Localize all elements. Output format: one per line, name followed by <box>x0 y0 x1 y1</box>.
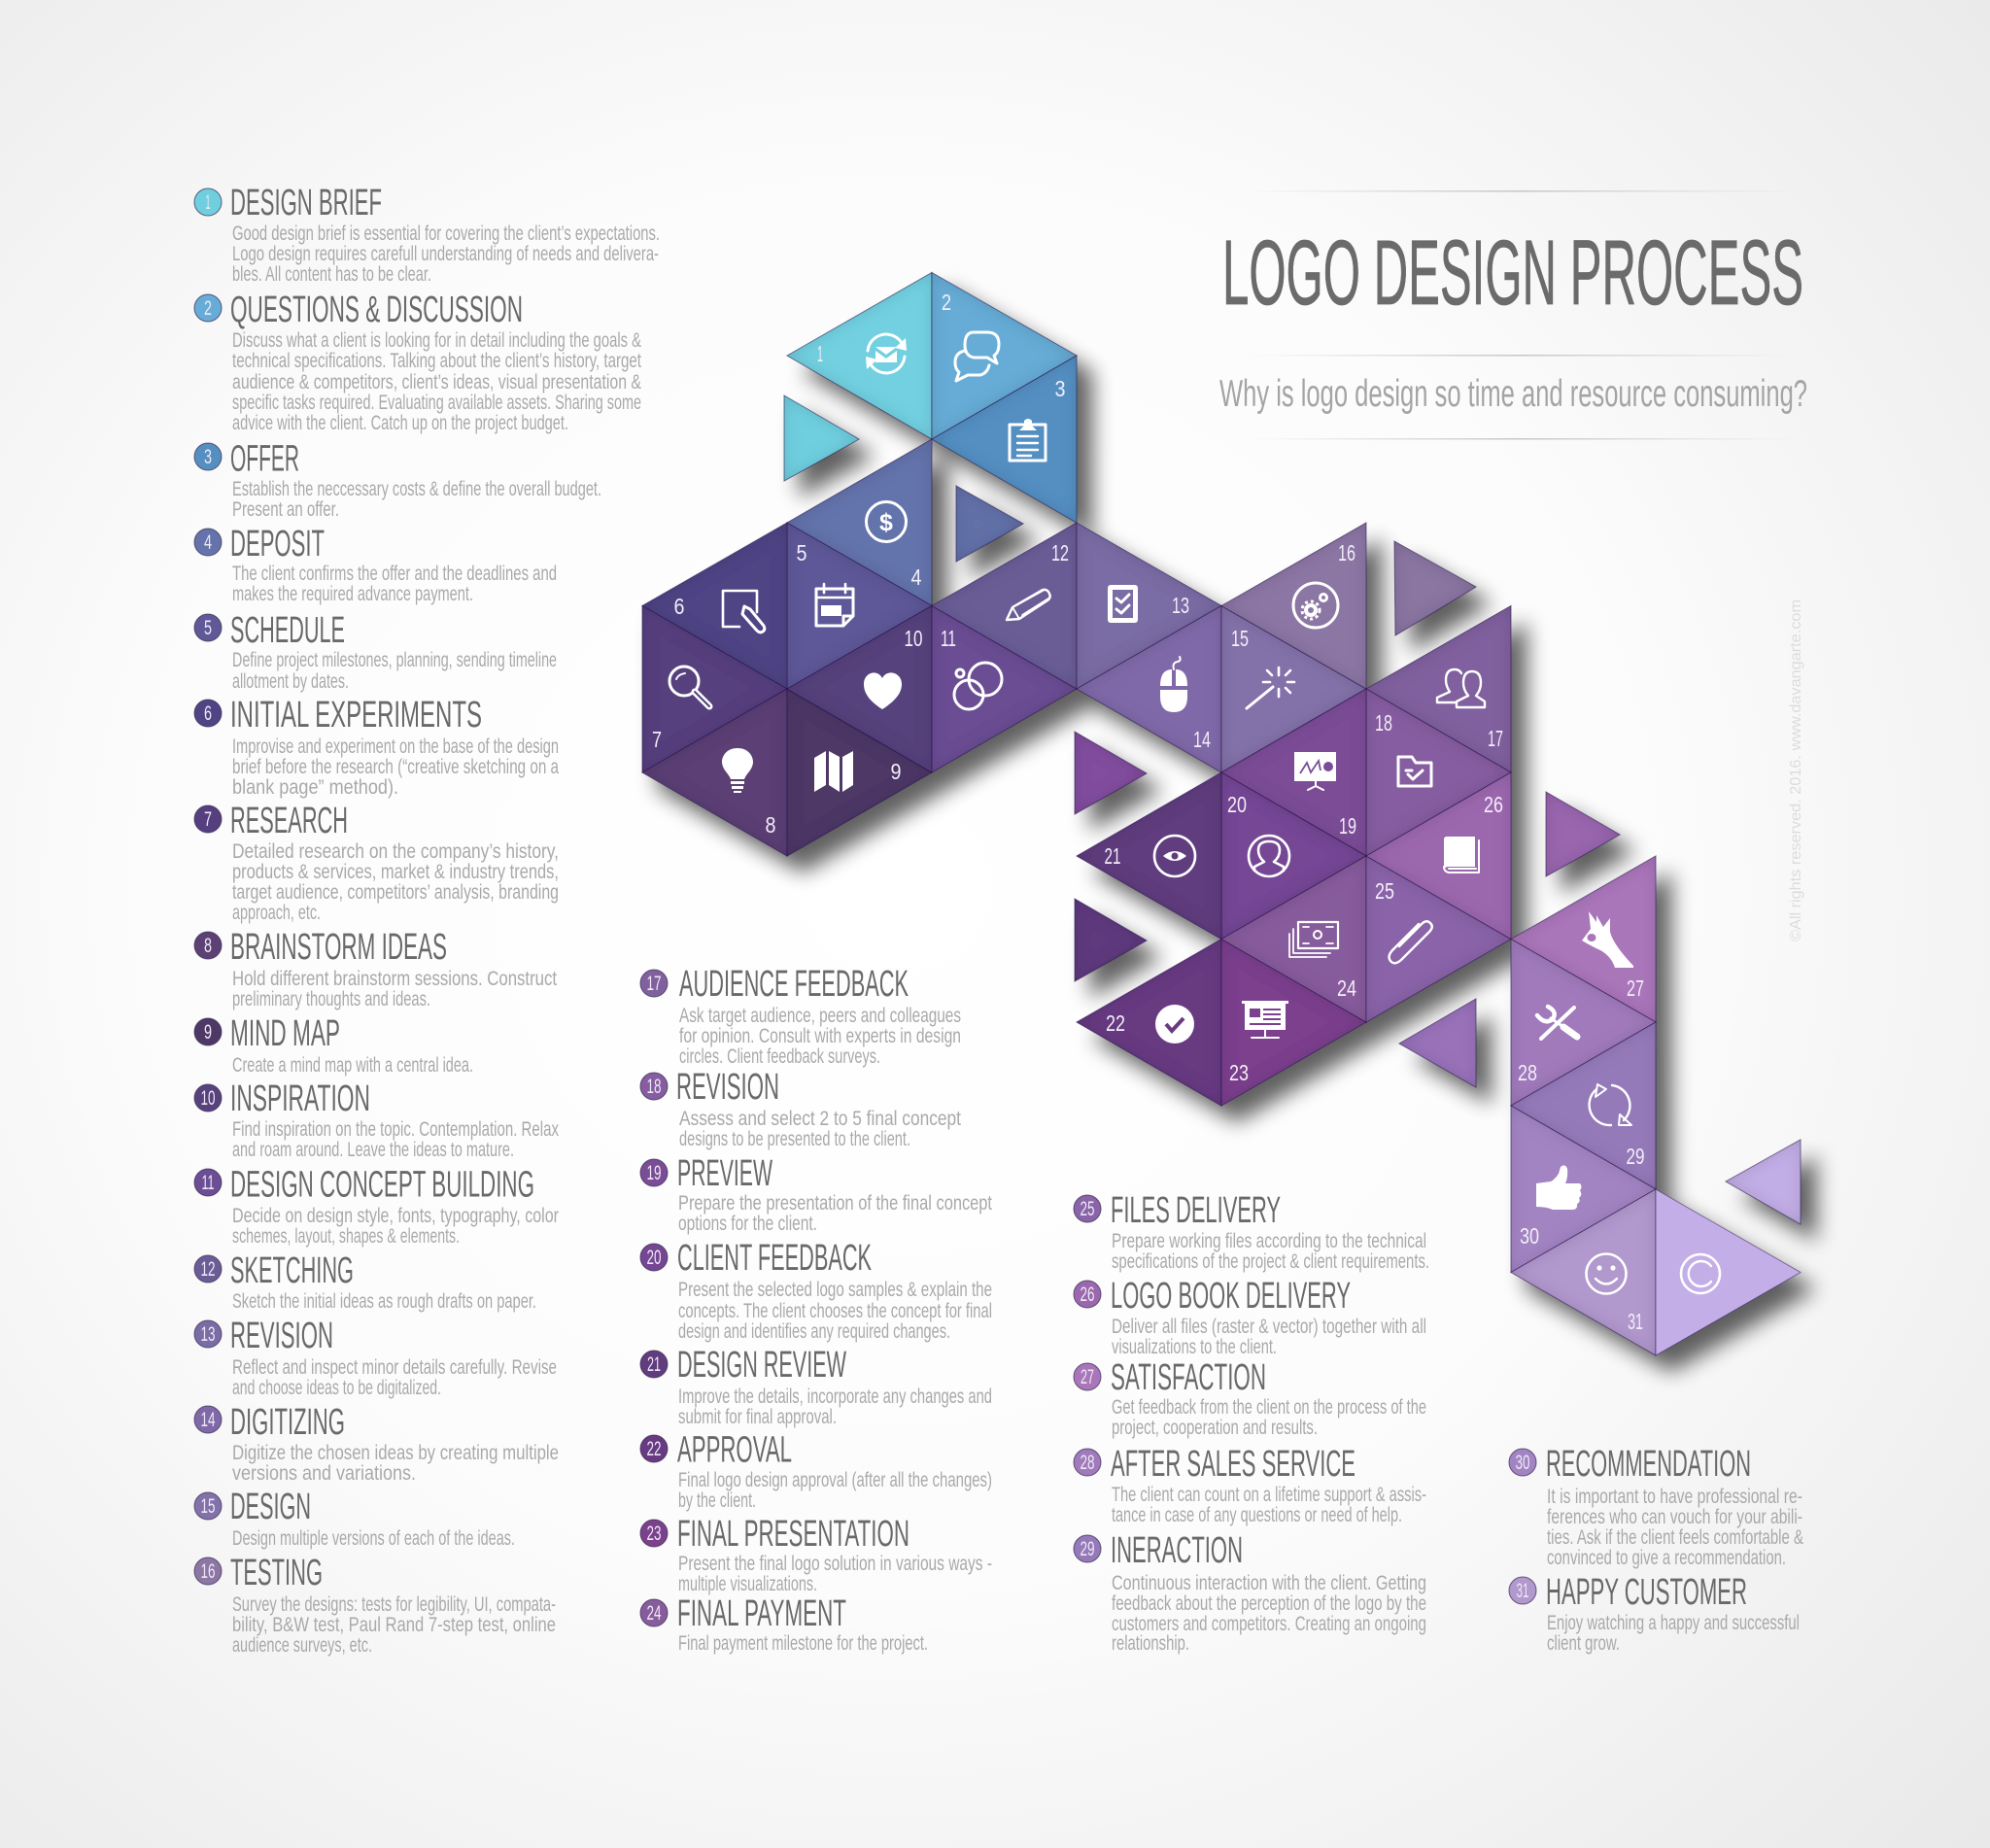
step 17 <box>640 964 961 1068</box>
step 3 <box>194 439 601 521</box>
step 17: circles. Client feedback surveys. <box>679 1044 880 1068</box>
step 27: project, cooperation and results. <box>1112 1416 1318 1439</box>
tile 26: 26 <box>1484 792 1503 817</box>
step 27: 27 <box>1081 1366 1094 1388</box>
icon: email refresh <box>866 334 907 373</box>
icon: book <box>1444 837 1479 873</box>
tile 10 <box>787 606 932 772</box>
step 6: INITIAL EXPERIMENTS <box>230 695 482 736</box>
loose triangle: purple <box>1075 732 1147 814</box>
step 9: 9 <box>204 1021 212 1044</box>
tile 29 <box>1511 1022 1656 1189</box>
icon: money <box>1289 922 1338 957</box>
step 15 <box>194 1487 515 1550</box>
step 4: makes the required advance payment. <box>232 582 473 605</box>
step 30: RECOMMENDATION <box>1546 1444 1751 1485</box>
tile 25: 25 <box>1375 878 1394 904</box>
step 7: 7 <box>204 808 212 831</box>
step 7: Detailed research on the company’s history, <box>232 839 559 863</box>
tile 15 <box>1221 606 1366 772</box>
step 28: The client can count on a lifetime support & assis- <box>1112 1483 1426 1506</box>
step 25 <box>1074 1190 1429 1273</box>
icon: paperclip <box>1390 921 1432 963</box>
step 2: specific tasks required. Evaluating available assets. Sharing some <box>232 391 641 414</box>
icon: people <box>1437 669 1485 707</box>
tile 27 <box>1511 856 1656 1022</box>
step 1: 1 <box>206 191 210 214</box>
step 13 <box>194 1316 557 1399</box>
tile 5 <box>787 523 932 689</box>
step 31: client grow. <box>1547 1631 1620 1655</box>
step 18: Assess and select 2 to 5 final concept <box>679 1107 961 1130</box>
step 28: tance in case of any questions or need of help. <box>1112 1503 1402 1526</box>
step 6 <box>194 695 559 799</box>
icon: pencil <box>1007 590 1050 620</box>
step 26: visualizations to the client. <box>1112 1335 1277 1358</box>
tile 28: 28 <box>1518 1060 1537 1085</box>
step 10: Find inspiration on the topic. Contemplation. Relax <box>232 1117 559 1141</box>
tile 20 <box>1221 772 1366 939</box>
step 2: QUESTIONS & DISCUSSION <box>230 290 523 330</box>
step 7: target audience, competitors’ analysis, branding <box>232 880 559 904</box>
step 2: technical specifications. Talking about the client’s history, target <box>232 349 641 372</box>
loose triangle: lilac <box>1726 1140 1801 1224</box>
step 4: The client confirms the offer and the deadlines and <box>232 562 557 585</box>
step 17: AUDIENCE FEEDBACK <box>679 964 909 1005</box>
step 15: 15 <box>200 1495 216 1518</box>
step 10 <box>194 1078 559 1161</box>
step 24 <box>640 1593 928 1655</box>
step 9: MIND MAP <box>230 1013 340 1054</box>
step 1 <box>194 183 660 286</box>
step 12 <box>194 1250 536 1313</box>
step 2: advice with the client. Catch up on the project budget. <box>232 411 568 434</box>
step 18: REVISION <box>676 1067 779 1108</box>
step 31 <box>1509 1572 1800 1655</box>
step 4: DEPOSIT <box>230 524 325 565</box>
step 26: 26 <box>1081 1283 1094 1306</box>
tile copyright <box>1656 1189 1801 1355</box>
step 4 <box>194 524 557 605</box>
step 17: for opinion. Consult with experts in design <box>679 1024 961 1047</box>
tile 12 <box>932 523 1077 689</box>
left text column <box>194 183 660 1657</box>
step 20: concepts. The client chooses the concept for final <box>678 1299 992 1322</box>
tile 7 <box>642 606 787 772</box>
step 21: DESIGN REVIEW <box>677 1345 846 1386</box>
tile 22 <box>1077 939 1221 1106</box>
tile 19 <box>1221 689 1366 856</box>
icon: folder check <box>1398 757 1431 786</box>
step 13: REVISION <box>230 1316 333 1356</box>
tile 17: 17 <box>1488 726 1503 751</box>
step 10: and roam around. Leave the ideas to mature. <box>232 1138 514 1161</box>
step 2: Discuss what a client is looking for in detail including the goals & <box>232 328 641 352</box>
step 20: CLIENT FEEDBACK <box>677 1238 872 1279</box>
icon: gears <box>1293 583 1338 628</box>
step 30: ties. Ask if the client feels comfortable & <box>1547 1525 1803 1549</box>
tile 21 <box>1077 772 1221 939</box>
tile 10: 10 <box>904 626 923 651</box>
step 13: and choose ideas to be digitalized. <box>232 1376 441 1399</box>
icon: smiley <box>1586 1253 1627 1294</box>
step 8: preliminary thoughts and ideas. <box>232 987 430 1010</box>
step 7 <box>194 801 559 924</box>
step 4: 4 <box>204 531 212 554</box>
icon: copyright <box>1681 1254 1720 1293</box>
icon: check circle <box>1155 1005 1194 1044</box>
icon: heart <box>864 672 902 709</box>
step 7: RESEARCH <box>230 801 348 841</box>
step 19: Prepare the presentation of the final concept <box>678 1191 992 1215</box>
step 2: audience & competitors, client’s ideas, visual presentation & <box>232 370 641 394</box>
step 11: Decide on design style, fonts, typography, color <box>232 1204 559 1227</box>
step 23: Present the final logo solution in various ways - <box>678 1552 992 1575</box>
tile 20: 20 <box>1227 792 1247 817</box>
step 31: Enjoy watching a happy and successful <box>1547 1611 1800 1634</box>
step 22: 22 <box>647 1438 661 1460</box>
step 6: brief before the research (“creative sketching on a <box>232 755 559 778</box>
step 16 <box>194 1553 556 1657</box>
step 5: Define project milestones, planning, sending timeline <box>232 648 557 671</box>
tile 11: 11 <box>941 626 956 651</box>
tile 30: 30 <box>1520 1223 1539 1249</box>
step 3: Present an offer. <box>232 497 339 521</box>
step 11 <box>194 1164 559 1248</box>
step 18: 18 <box>647 1076 661 1098</box>
step 3: 3 <box>204 446 212 468</box>
step 29: 29 <box>1081 1538 1094 1560</box>
step 16: 16 <box>200 1560 216 1583</box>
step 1: bles. All content has to be clear. <box>232 262 431 286</box>
step 21 <box>640 1345 992 1428</box>
tile 7: 7 <box>652 727 662 752</box>
tile 11 <box>932 606 1077 772</box>
step 7: approach, etc. <box>232 901 321 924</box>
icon: map <box>814 751 853 792</box>
step 24: 24 <box>647 1602 662 1625</box>
step 12: 12 <box>200 1258 216 1281</box>
step 14: DIGITIZING <box>230 1402 345 1443</box>
step 26: LOGO BOOK DELIVERY <box>1111 1276 1351 1317</box>
step 3: OFFER <box>230 439 299 480</box>
step 23: 23 <box>647 1523 661 1545</box>
step 29: INERACTION <box>1111 1530 1243 1571</box>
tile 4: 4 <box>911 565 922 590</box>
icon: dollar coin <box>867 501 906 542</box>
loose triangle: grey purple <box>1394 541 1476 635</box>
step 13: Reflect and inspect minor details carefully. Revise <box>232 1355 557 1379</box>
icon: overlapping circles <box>954 663 1002 709</box>
tile 13: 13 <box>1172 593 1189 618</box>
tile 19: 19 <box>1339 813 1356 838</box>
step 6: Improvise and experiment on the base of the design <box>232 735 559 758</box>
icon: dollar coin: $ <box>879 509 893 536</box>
step 8 <box>194 927 557 1010</box>
tile 26 <box>1366 772 1511 939</box>
loose triangle: dark purple <box>1075 899 1147 981</box>
icon: refresh arrows <box>1590 1084 1631 1125</box>
step 8: Hold different brainstorm sessions. Construct <box>232 967 557 990</box>
step 12: Sketch the initial ideas as rough drafts on paper. <box>232 1289 536 1313</box>
step 25: Prepare working files according to the technical <box>1112 1229 1426 1252</box>
step 22 <box>640 1430 992 1512</box>
step 2: 2 <box>204 297 212 320</box>
middle text column <box>640 964 992 1655</box>
step 19: options for the client. <box>678 1212 817 1235</box>
step 2 <box>194 290 641 434</box>
step 31: 31 <box>1516 1580 1529 1602</box>
tile 6 <box>642 523 787 689</box>
step 29: customers and competitors. Creating an ongoing <box>1112 1612 1426 1635</box>
icon: sketch note <box>723 591 765 633</box>
step 22: APPROVAL <box>677 1430 792 1471</box>
step 26 <box>1074 1276 1426 1358</box>
icon: clipboard <box>1010 419 1046 461</box>
tile 24: 24 <box>1337 975 1356 1001</box>
tile 2: 2 <box>942 290 951 315</box>
tile 12: 12 <box>1051 540 1069 565</box>
step 17: Ask target audience, peers and colleagues <box>679 1004 961 1027</box>
step 15: Design multiple versions of each of the ideas. <box>232 1526 515 1550</box>
tile 14 <box>1077 606 1221 772</box>
step 9: Create a mind map with a central idea. <box>232 1053 473 1077</box>
step 16: bility, B&W test, Paul Rand 7-step test, online <box>232 1613 556 1636</box>
step 11: 11 <box>202 1172 214 1194</box>
icon: display board <box>1242 1001 1288 1038</box>
step 5: allotment by dates. <box>232 669 349 693</box>
tile 15: 15 <box>1231 626 1249 651</box>
step 20: Present the selected logo samples & explain the <box>678 1278 992 1301</box>
step 9 <box>194 1013 473 1077</box>
tile 24 <box>1221 856 1366 1022</box>
step 21: 21 <box>647 1353 661 1376</box>
icon: checklist <box>1108 585 1138 623</box>
icon: light bulb <box>722 748 753 793</box>
step 30: ferences who can vouch for your abili- <box>1547 1505 1802 1528</box>
step 26: Deliver all files (raster & vector) together with all <box>1112 1315 1426 1338</box>
tile 31: 31 <box>1628 1309 1643 1334</box>
step 16: TESTING <box>230 1553 323 1593</box>
loose triangle: blue <box>956 486 1023 562</box>
tile 18: 18 <box>1375 710 1392 736</box>
step 21: Improve the details, incorporate any changes and <box>678 1385 992 1408</box>
icon: OK hand <box>1582 911 1633 968</box>
loose triangle: orchid <box>1546 792 1620 876</box>
step 27: SATISFACTION <box>1111 1357 1266 1398</box>
step 11: schemes, layout, shapes & elements. <box>232 1224 460 1248</box>
step 5: 5 <box>204 617 212 639</box>
step 23 <box>640 1514 992 1595</box>
step 28: 28 <box>1081 1452 1094 1474</box>
step 24: Final payment milestone for the project. <box>678 1631 928 1655</box>
fourth text column <box>1509 1444 1803 1655</box>
tile 23 <box>1221 939 1366 1106</box>
icon: magic wand <box>1247 667 1294 708</box>
step 25: FILES DELIVERY <box>1111 1190 1281 1231</box>
tile 13 <box>1077 523 1221 689</box>
watermark: ©All rights reserved. 2016. www.davangarte.com <box>1788 599 1804 941</box>
step 14: versions and variations. <box>232 1461 416 1485</box>
icon: chat bubbles <box>955 332 999 381</box>
step 5 <box>194 610 557 693</box>
tile 8 <box>642 689 787 856</box>
step 29: feedback about the perception of the logo by the <box>1112 1591 1426 1615</box>
triangle mosaic chart <box>642 272 1801 1355</box>
icon: tools <box>1537 1007 1577 1039</box>
step 10: 10 <box>200 1087 216 1110</box>
step 17: 17 <box>647 973 661 995</box>
step 20: design and identifies any required changes. <box>678 1319 950 1343</box>
icon: mouse <box>1160 657 1187 712</box>
tile 22: 22 <box>1106 1010 1125 1036</box>
tile 3 <box>932 356 1077 523</box>
step 12: SKETCHING <box>230 1250 354 1291</box>
step 30: 30 <box>1516 1452 1529 1474</box>
tile 1: 1 <box>817 341 823 366</box>
step 18 <box>640 1067 961 1150</box>
tile 2 <box>932 272 1077 439</box>
step 23: FINAL PRESENTATION <box>677 1514 909 1555</box>
step 25: specifications of the project & client requirements. <box>1112 1249 1429 1273</box>
step 28 <box>1074 1444 1426 1526</box>
step 16: audience surveys, etc. <box>232 1633 372 1657</box>
step 30: It is important to have professional re- <box>1547 1485 1802 1508</box>
step 1: Logo design requires carefull understanding of needs and delivera- <box>232 242 659 265</box>
step 11: DESIGN CONCEPT BUILDING <box>230 1164 534 1205</box>
icon: presentation board <box>1294 752 1336 790</box>
step 29: relationship. <box>1112 1631 1189 1655</box>
step 16: Survey the designs: tests for legibility, UI, compata- <box>232 1592 556 1616</box>
step 29 <box>1074 1530 1426 1655</box>
third text column <box>1074 1190 1429 1655</box>
tile 14: 14 <box>1193 727 1211 752</box>
icon: calendar <box>816 584 853 626</box>
step 22: by the client. <box>678 1489 756 1512</box>
icon: eye circle <box>1154 836 1195 876</box>
loose triangle: cyan <box>784 395 859 481</box>
step 21: submit for final approval. <box>678 1405 837 1428</box>
step 20: 20 <box>647 1247 661 1269</box>
step 13: 13 <box>200 1323 216 1346</box>
step 31: HAPPY CUSTOMER <box>1546 1572 1747 1613</box>
icon: thumbs up <box>1536 1165 1582 1210</box>
step 27: Get feedback from the client on the process of the <box>1112 1395 1426 1419</box>
tile 29: 29 <box>1627 1144 1644 1169</box>
step 6: 6 <box>204 702 212 725</box>
step 20 <box>640 1238 992 1343</box>
tile 3: 3 <box>1055 376 1065 401</box>
step 19 <box>640 1153 992 1235</box>
step 14: Digitize the chosen ideas by creating multiple <box>232 1441 559 1464</box>
tile 6: 6 <box>674 594 684 619</box>
tile 16: 16 <box>1338 540 1355 565</box>
tile 28 <box>1511 939 1656 1106</box>
step 22: Final logo design approval (after all the changes) <box>678 1468 992 1491</box>
tile 21: 21 <box>1104 843 1121 869</box>
step 10: INSPIRATION <box>230 1078 370 1119</box>
tile 17 <box>1366 606 1511 772</box>
step 18: designs to be presented to the client. <box>679 1127 910 1150</box>
step 3: Establish the neccessary costs & define the overall budget. <box>232 477 601 500</box>
step 1: DESIGN BRIEF <box>230 183 382 223</box>
tile 4 <box>787 439 932 606</box>
step 19: 19 <box>647 1162 661 1184</box>
step 23: multiple visualizations. <box>678 1572 817 1595</box>
step 14 <box>194 1402 559 1485</box>
step 1: Good design brief is essential for covering the client’s expectations. <box>232 222 660 245</box>
step 28: AFTER SALES SERVICE <box>1111 1444 1355 1485</box>
tile 31 <box>1511 1189 1656 1355</box>
tile 9 <box>787 689 932 856</box>
tile 1 <box>787 272 932 439</box>
tile 9: 9 <box>890 759 902 784</box>
tile 23: 23 <box>1229 1060 1249 1085</box>
step 25: 25 <box>1081 1198 1094 1220</box>
tile 25 <box>1366 856 1511 1022</box>
step 7: products & services, market & industry trends, <box>232 860 559 883</box>
tile 8: 8 <box>766 812 775 838</box>
step 6: blank page” method). <box>232 775 398 799</box>
icon: magnifier <box>669 667 709 706</box>
step 30 <box>1509 1444 1803 1569</box>
tile 30 <box>1511 1106 1656 1273</box>
tile 16 <box>1221 523 1366 689</box>
step 8: 8 <box>204 935 212 957</box>
tile 18 <box>1366 689 1511 856</box>
step 19: PREVIEW <box>677 1153 772 1194</box>
step 8: BRAINSTORM IDEAS <box>230 927 447 968</box>
icon: user circle <box>1249 836 1289 876</box>
step 29: Continuous interaction with the client. Getting <box>1112 1571 1426 1594</box>
tile 27: 27 <box>1627 975 1644 1001</box>
step 15: DESIGN <box>230 1487 311 1527</box>
step 30: convinced to give a recommendation. <box>1547 1546 1786 1569</box>
tile 5: 5 <box>797 540 806 565</box>
step 14: 14 <box>200 1409 216 1431</box>
step 24: FINAL PAYMENT <box>677 1593 846 1634</box>
loose triangle: violet <box>1399 999 1476 1087</box>
step 5: SCHEDULE <box>230 610 345 651</box>
step 27 <box>1074 1357 1426 1439</box>
